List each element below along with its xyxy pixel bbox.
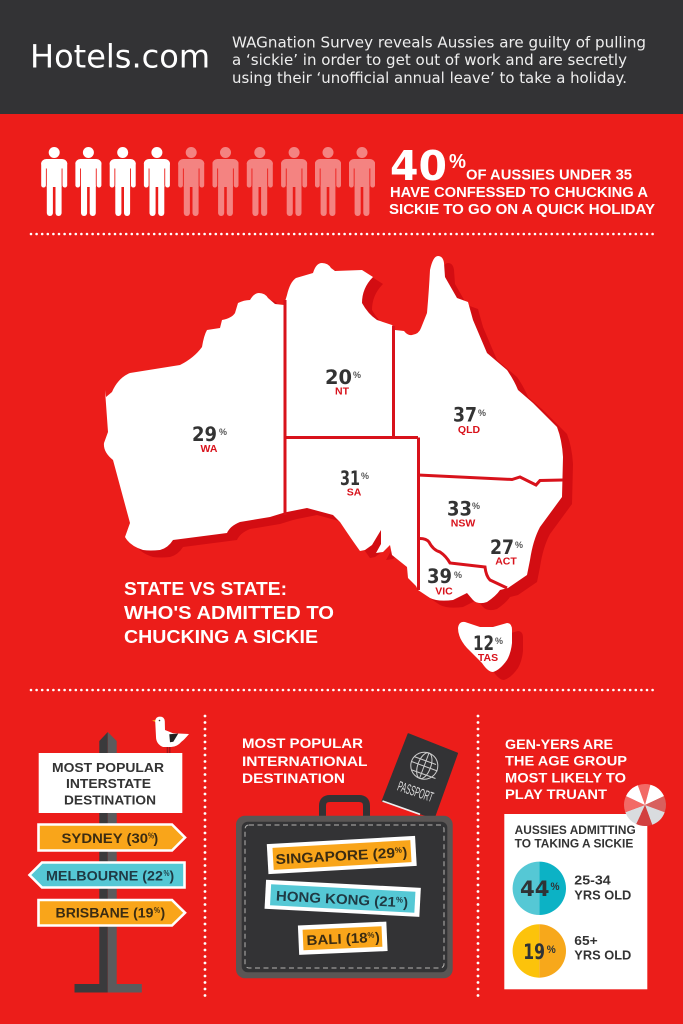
40% statistic text bbox=[389, 142, 655, 218]
label: TAS 12%: TAS bbox=[478, 652, 498, 664]
label: NT 20% bbox=[325, 366, 362, 398]
label: VIC 39%: VIC bbox=[435, 586, 453, 598]
label: ACT 27% bbox=[490, 536, 524, 568]
arrow: Melbourne bbox=[30, 862, 184, 888]
international destination heading bbox=[242, 736, 368, 786]
panel heading bbox=[515, 825, 636, 850]
label: ACT 27%: 27 bbox=[490, 536, 514, 559]
Gen-Y heading: GEN-YERS ARE bbox=[505, 737, 613, 752]
40% statistic text: 40 bbox=[390, 142, 447, 190]
international destination heading: MOST POPULAR bbox=[242, 736, 363, 751]
sign heading bbox=[39, 753, 182, 813]
luggage tag: Singapore bbox=[267, 836, 417, 874]
label: QLD 37%: % bbox=[478, 408, 487, 419]
label: NSW 33%: % bbox=[472, 501, 481, 512]
icon: passport bbox=[382, 734, 457, 818]
header band bbox=[0, 0, 683, 114]
label: WA 29%: % bbox=[219, 427, 228, 438]
label: WA 29%: WA bbox=[201, 443, 218, 455]
header intro text: WAGnation Survey reveals Aussies are guilty of pulling bbox=[232, 34, 646, 52]
arrow: Brisbane: ) bbox=[160, 904, 165, 920]
icon: seagull bbox=[152, 717, 189, 753]
arrow: Brisbane bbox=[38, 900, 185, 926]
suitcase handle bbox=[322, 798, 366, 818]
signpost: interstate destinations bbox=[30, 717, 189, 992]
Gen-Y heading: PLAY TRUANT bbox=[505, 787, 608, 802]
icon: beach ball bbox=[624, 784, 666, 826]
international destination heading: DESTINATION bbox=[242, 771, 345, 786]
suitcase bbox=[236, 798, 453, 978]
luggage tag: Singapore: SINGAPORE (29 bbox=[275, 845, 396, 867]
label: NT 20%: NT bbox=[335, 386, 350, 398]
label: ACT 27%: % bbox=[515, 540, 524, 551]
map heading bbox=[124, 579, 334, 647]
luggage tag: Bali: % bbox=[367, 931, 375, 940]
label: SA 31%: SA bbox=[347, 486, 362, 498]
age label: 25-34: 25-34 bbox=[574, 873, 611, 887]
age label: 65+: YRS OLD bbox=[574, 948, 631, 962]
circle stat: 19% bbox=[513, 924, 566, 978]
label: NSW 33% bbox=[447, 498, 481, 530]
map heading: STATE VS STATE: bbox=[124, 579, 287, 599]
40% statistic text: SICKIE TO GO ON A QUICK HOLIDAY bbox=[389, 202, 655, 218]
luggage tag: Bali: BALI (18 bbox=[306, 929, 368, 948]
circle stat: 19%: % bbox=[547, 944, 556, 956]
label: NSW 33%: NSW bbox=[451, 518, 475, 530]
header intro text: a ‘sickie’ in order to get out of work and are secretly bbox=[232, 51, 627, 69]
map heading: WHO'S ADMITTED TO bbox=[124, 603, 334, 623]
circle stat: 44% bbox=[513, 862, 566, 915]
label: QLD 37%: QLD bbox=[458, 424, 480, 436]
arrow: Sydney: SYDNEY (30 bbox=[62, 830, 148, 846]
map of Australia by state bbox=[104, 256, 573, 680]
luggage tag: Singapore: ) bbox=[402, 844, 408, 860]
Gen-Y heading: THE AGE GROUP bbox=[505, 754, 627, 769]
circle stat: 44%: 44 bbox=[520, 877, 550, 901]
age label: 25-34 bbox=[574, 873, 631, 902]
age label: 25-34: YRS OLD bbox=[574, 888, 631, 902]
arrow: Sydney: ) bbox=[154, 830, 158, 846]
luggage tag: Hong Kong bbox=[265, 880, 421, 917]
circle stat: 19%: 19 bbox=[523, 940, 545, 964]
sign heading: MOST POPULAR bbox=[52, 761, 164, 775]
luggage tag: Hong Kong: ) bbox=[403, 894, 408, 910]
Gen-Y heading bbox=[505, 737, 627, 802]
arrow: Brisbane: BRISBANE (19 bbox=[56, 904, 154, 920]
Gen-Y heading: MOST LIKELY TO bbox=[505, 770, 626, 785]
circle stat: 44%: % bbox=[550, 881, 560, 893]
luggage tag: Singapore: % bbox=[395, 846, 402, 855]
panel: Aussies admitting to taking a sickie bbox=[504, 814, 647, 989]
arrow: Melbourne: MELBOURNE (22 bbox=[46, 868, 163, 884]
label: WA 29%: 29 bbox=[192, 423, 217, 446]
logo: Hotels.com: Hotels.com bbox=[30, 38, 210, 76]
sign heading: DESTINATION bbox=[64, 794, 156, 808]
panel heading: TO TAKING A SICKIE bbox=[515, 838, 634, 850]
map heading: CHUCKING A SICKIE bbox=[124, 627, 318, 647]
luggage tag: Bali: ) bbox=[375, 929, 380, 945]
40% statistic text: % bbox=[449, 151, 466, 173]
luggage tag: Hong Kong: % bbox=[396, 895, 403, 905]
40% statistic text: OF AUSSIES UNDER 35 bbox=[466, 168, 632, 184]
label: QLD 37% bbox=[453, 404, 487, 436]
label: SA 31%: % bbox=[361, 471, 370, 482]
label: WA 29% bbox=[192, 423, 228, 455]
signpost pole bbox=[74, 732, 142, 992]
luggage tag: Bali bbox=[298, 922, 388, 955]
sign heading: INTERSTATE bbox=[66, 777, 151, 791]
label: TAS 12%: 12 bbox=[473, 632, 494, 655]
arrow: Brisbane: % bbox=[154, 906, 160, 915]
icon: passport: PASSPORT bbox=[396, 778, 436, 805]
age label: 65+ bbox=[574, 934, 631, 962]
pictogram: 4 in 10 people bbox=[41, 147, 375, 216]
panel heading: AUSSIES ADMITTING bbox=[515, 825, 636, 837]
label: SA 31% bbox=[340, 467, 370, 498]
arrow: Melbourne: % bbox=[164, 869, 170, 878]
label: VIC 39%: 39 bbox=[427, 565, 452, 588]
label: TAS 12%: % bbox=[495, 636, 504, 647]
label: VIC 39%: % bbox=[454, 570, 463, 581]
header intro text: using their ‘unofficial annual leave’ to take a holiday. bbox=[232, 69, 627, 87]
label: ACT 27%: ACT bbox=[495, 556, 517, 568]
label: NT 20%: % bbox=[353, 370, 362, 381]
label: NT 20%: 20 bbox=[325, 366, 352, 389]
label: SA 31%: 31 bbox=[340, 467, 360, 490]
luggage tag: Hong Kong: HONG KONG (21 bbox=[276, 888, 397, 910]
40% statistic text: HAVE CONFESSED TO CHUCKING A bbox=[390, 185, 649, 201]
arrow: Sydney: % bbox=[148, 832, 154, 840]
arrow: Melbourne: ) bbox=[170, 868, 174, 884]
label: VIC 39% bbox=[427, 565, 463, 598]
arrow: Sydney bbox=[38, 824, 185, 850]
international destination heading: INTERNATIONAL bbox=[242, 754, 368, 769]
label: TAS 12% bbox=[473, 632, 504, 664]
age label: 65+: 65+ bbox=[574, 934, 598, 948]
label: QLD 37%: 37 bbox=[453, 404, 477, 426]
header intro text bbox=[232, 34, 646, 87]
label: NSW 33%: 33 bbox=[447, 498, 472, 520]
